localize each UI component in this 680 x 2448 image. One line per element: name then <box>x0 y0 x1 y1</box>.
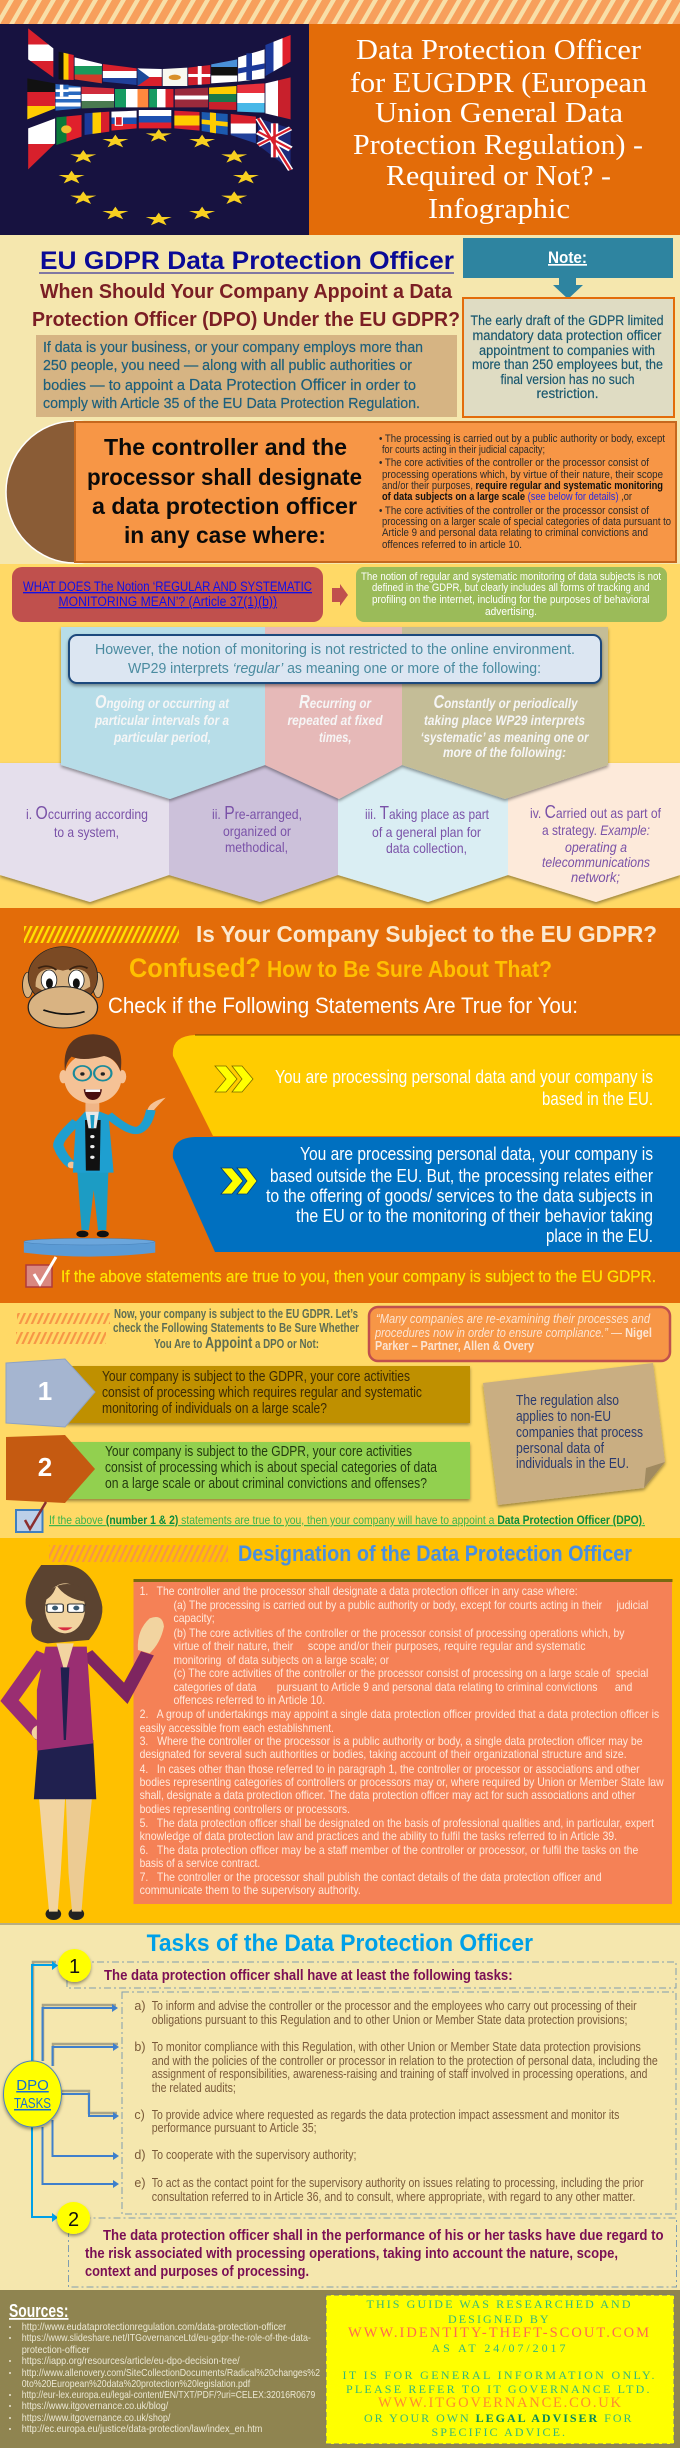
credits box: THIS GUIDE WAS RESEARCHED AND <box>366 2297 631 2311</box>
DPO tasks ellipse <box>4 2061 62 2127</box>
panel: designation articles: offences referred to in Article 10. <box>174 1693 325 1707</box>
tasks list box: a) <box>134 1999 146 2013</box>
systematic meaning items: telecommunications <box>542 854 650 870</box>
credits box: OR YOUR OWN LEGAL ADVISER FOR <box>364 2411 632 2425</box>
heading: Designation of the Data Protection Officer <box>238 1541 632 1566</box>
subheading: confused: Confused? <box>129 953 261 983</box>
intro text <box>113 1307 359 1352</box>
heading: is your company subject: Is Your Company Subject to the EU GDPR? <box>196 921 657 947</box>
panel: designation articles: capacity; <box>174 1611 215 1625</box>
text block: if data is your business: comply with Article 35 of the EU Data Protection Regulation. <box>43 395 420 412</box>
tasks list box: performance pursuant to Article 35; <box>152 2121 317 2135</box>
systematic meaning items: ii. Pre-arranged, <box>212 803 302 823</box>
bullet list: Article 9 and personal data relating to criminal convictions and <box>382 527 648 539</box>
header: title panel: Protection Regulation) - <box>353 130 643 161</box>
task 2 box: the risk associated with processing operations, taking into account the nature, scope, <box>85 2245 618 2262</box>
regular meaning items: taking place WP29 interprets <box>424 712 585 728</box>
hatch decoration <box>49 1545 228 1562</box>
DPO tasks ellipse: DPO <box>16 2077 49 2094</box>
bullet list: of data subjects on a large scale (see below for details) ,or <box>382 491 632 503</box>
tasks list box: To cooperate with the supervisory authority; <box>152 2148 356 2162</box>
tasks list box: the related audits; <box>152 2081 236 2095</box>
check box <box>26 1257 56 1287</box>
regular meaning items: ‘systematic’ as meaning one or <box>420 729 590 745</box>
regular meaning items: Ongoing or occurring at <box>95 692 230 712</box>
section: regular and systematic monitoring <box>0 564 680 908</box>
number circle 1: 1 <box>69 1956 80 1978</box>
statement: based in EU: based in the EU. <box>542 1089 653 1109</box>
big statement: a data protection officer <box>92 493 357 519</box>
heading: Tasks of the Data Protection Officer <box>147 1930 533 1957</box>
intro text: You Are to Appoint a DPO or Not: <box>154 1335 319 1352</box>
sources heading: Sources: <box>9 2301 68 2321</box>
systematic meaning items: a strategy. Example: <box>542 822 650 838</box>
hatch decoration <box>16 1313 110 1344</box>
icon: curved EU member flags and ring of stars <box>27 28 291 225</box>
credits box: DESIGNED BY <box>448 2312 549 2326</box>
note header with arrow: Note: <box>548 248 587 267</box>
subheading: confused <box>129 953 552 983</box>
subheading: when should your company appoint: When Should Your Company Appoint a Data <box>40 280 453 303</box>
section: designation of the DPO <box>0 1538 680 1923</box>
half circle tab <box>6 421 144 563</box>
callout: what does the notion mean <box>12 567 323 622</box>
systematic meaning items: network; <box>571 869 620 885</box>
note paper: non-EU companies: personal data of <box>516 1441 605 1457</box>
regular meaning items: Constantly or periodically <box>434 692 578 712</box>
top stripes banner <box>0 0 680 24</box>
tasks list box: e) <box>134 2176 146 2190</box>
icon: double chevron <box>221 1168 257 1194</box>
definition box: profiling on the internet, including for the purposes of behavioral <box>372 594 650 606</box>
note text box: appointment to companies with <box>479 343 655 358</box>
systematic meaning items <box>26 802 661 885</box>
conclusion text: If the above (number 1 & 2) statements are true to you, then your company will have to appoint a Data Protection Officer (DPO). <box>49 1513 645 1527</box>
however box <box>69 635 601 683</box>
bullet list <box>379 433 671 551</box>
text block: if data is your business: bodies — to appoint a Data Protection Officer in order to <box>43 377 416 394</box>
section: footer <box>0 2290 680 2448</box>
definition box: advertising. <box>485 606 537 618</box>
sources list: https://iapp.org/resources/article/eu-dpo-decision-tree/ <box>22 2355 240 2367</box>
intro text: check the Following Statements to Be Sure Whether <box>113 1321 359 1335</box>
text block: if data is your business: If data is your business, or your company employs more than <box>43 339 423 356</box>
item 2: consist of processing which is about special categories of data <box>105 1460 438 1476</box>
regular meaning items: more of the following: <box>443 744 566 760</box>
systematic meaning items: iv. Carried out as part of <box>530 802 661 822</box>
item 1: consist of processing which requires regular and systematic <box>102 1385 422 1401</box>
sources list: http://www.eudataprotectionregulation.com/data-protection-officer <box>22 2321 287 2333</box>
callout: what does the notion mean: MONITORING MEAN’? (Article 37(1)(b)) <box>58 594 277 609</box>
bullet list: • The core activities of the controller or the processor consist of <box>379 505 650 517</box>
note text box: more than 250 employees but, the <box>472 357 663 372</box>
header: title panel: Infographic <box>428 194 570 225</box>
illustration: woman in magenta suit <box>10 1565 164 1920</box>
upper row of chevrons <box>61 627 608 799</box>
bullet list: • The core activities of the controller or the processor consist of <box>379 457 650 469</box>
however box: However, the notion of monitoring is not restricted to the online environment. <box>95 642 575 658</box>
sources list: http://www.allenovery.com/SiteCollectionDocuments/Radical%20changes%2 <box>22 2367 320 2379</box>
task 2 box <box>68 2218 676 2287</box>
note paper: non-EU companies: individuals in the EU. <box>516 1456 629 1472</box>
sources list: http://ec.europa.eu/justice/data-protection/law/index_en.htm <box>22 2423 263 2435</box>
panel: designation articles: bodies representing controllers or processors. <box>140 1802 350 1816</box>
systematic meaning items: operating a <box>565 839 627 855</box>
systematic meaning items: methodical, <box>225 839 288 855</box>
header: title panel: Data Protection Officer <box>356 35 642 66</box>
systematic meaning items: organized or <box>223 823 291 839</box>
number circle 2 <box>57 2202 90 2234</box>
check box <box>16 1502 46 1532</box>
big statement: The controller and the <box>104 434 347 460</box>
bullet list: for courts acting in their judicial capacity; <box>382 444 545 456</box>
subheading: when should your company appoint <box>32 280 460 331</box>
sources list: 0to%20European%20data%20protection%20legislation.pdf <box>22 2378 250 2390</box>
credits box: SPECIFIC ADVICE. <box>432 2425 565 2439</box>
note header with arrow <box>463 238 673 299</box>
big statement <box>87 434 362 548</box>
systematic meaning items: i. Occurring according <box>26 803 148 823</box>
bullet list: offences referred to in article 10. <box>382 539 522 551</box>
regular meaning items: particular period, <box>113 729 211 745</box>
subheading: when should your company appoint: Protection Officer (DPO) Under the EU GDPR? <box>32 308 460 331</box>
systematic meaning items: data collection, <box>386 840 467 856</box>
lower row of chevrons <box>0 763 680 902</box>
sources list: https://www.itgovernance.co.uk/blog/ <box>22 2400 168 2412</box>
item 2 <box>6 1435 470 1503</box>
item 2: Your company is subject to the GDPR, your core activities <box>105 1444 412 1460</box>
systematic meaning items: of a general plan for <box>372 824 481 840</box>
sources list <box>9 2321 320 2435</box>
regular meaning items: repeated at fixed <box>288 712 383 728</box>
note text box: restriction. <box>536 386 598 401</box>
orange box <box>75 422 676 562</box>
section: when to appoint a DPO <box>0 235 680 564</box>
text block: if data is your business: 250 people, you need — along with all public authorities or <box>43 357 412 374</box>
task 1 heading box: The data protection officer shall have at least the following tasks: <box>104 1967 513 1984</box>
DPO tasks ellipse: TASKS <box>14 2095 51 2112</box>
conclusion text: If the above statements are true to you, then your company is subject to the EU GDPR. <box>61 1268 656 1286</box>
item 2: 2 <box>38 1452 52 1482</box>
note paper: non-EU companies: applies to non-EU <box>516 1409 611 1425</box>
panel: designation articles <box>134 1579 672 1904</box>
item 1: monitoring of individuals on a large scale? <box>102 1401 327 1417</box>
panel: controller and processor shall designate <box>6 421 676 563</box>
header: EU flags panel <box>0 24 309 235</box>
note text box: The early draft of the GDPR limited <box>470 313 664 328</box>
quote box: procedures now in order to ensure compliance.” — Nigel <box>374 1325 652 1340</box>
big statement: in any case where: <box>124 522 326 548</box>
task 1 heading box <box>67 1962 676 1988</box>
section: do you need to appoint a DPO <box>0 1303 680 1538</box>
tasks list box <box>122 1992 676 2214</box>
header: title panel <box>309 24 680 235</box>
icon: double chevron <box>215 1066 253 1092</box>
sources list: protection-officer <box>22 2344 90 2356</box>
item 1: 1 <box>38 1376 52 1406</box>
credits box: WWW.IDENTITY-THEFT-SCOUT.COM <box>348 2325 649 2341</box>
panel: designation articles: (b) The core activities of the controller or the processor consist of processing operations which, by <box>174 1626 624 1640</box>
statement: based in EU <box>173 1035 680 1136</box>
item 2: on a large scale or about criminal convictions and offenses? <box>105 1476 427 1492</box>
big statement: processor shall designate <box>87 464 362 490</box>
hatch decoration <box>24 926 179 943</box>
tasks list box: b) <box>134 2040 146 2054</box>
credits box: AS AT 24/07/2017 <box>432 2341 566 2355</box>
header: title panel: Required or Not? - <box>386 161 611 192</box>
note paper: non-EU companies: companies that process <box>516 1425 643 1441</box>
definition box <box>356 567 667 622</box>
note paper: non-EU companies: The regulation also <box>516 1393 619 1409</box>
header: title panel: for EUGDPR (European <box>350 68 647 99</box>
item 1 <box>6 1359 470 1427</box>
panel: designation articles: virtue of their nature, their scope and/or their purposes, require regular and systematic <box>174 1639 586 1653</box>
panel: designation articles: easily accessible from each establishment. <box>140 1721 334 1735</box>
quote box <box>369 1307 670 1361</box>
tasks list box: c) <box>134 2108 145 2122</box>
illustration: man with glasses on platform <box>24 1034 166 1257</box>
panel: designation articles: basis of a service contract. <box>140 1856 260 1870</box>
heading: EU GDPR Data Protection Officer: EU GDPR Data Protection Officer <box>40 247 454 275</box>
note text box <box>463 298 674 417</box>
sources list: https://www.itgovernance.co.uk/shop/ <box>22 2412 170 2424</box>
however box: WP29 interprets ‘regular’ as meaning one or more of the following: <box>128 661 541 677</box>
subheading: confused: How to Be Sure About That? <box>267 956 552 982</box>
arrow <box>332 584 348 606</box>
systematic meaning items: iii. Taking place as part <box>365 803 489 823</box>
credits box: WWW.ITGOVERNANCE.CO.UK <box>378 2395 622 2411</box>
panel: designation articles: knowledge of data protection law and practices and the ability to fulfil the tasks referred to in Article 39. <box>140 1829 617 1843</box>
intro text: Now, your company is subject to the EU GDPR. Let’s <box>114 1307 358 1321</box>
tasks list box: d) <box>134 2148 146 2162</box>
panel: designation articles: monitoring of data subjects on a large scale; or <box>174 1653 389 1667</box>
panel: designation articles: 1. The controller and the processor shall designate a data protection officer in any case where: <box>140 1584 578 1598</box>
note text box: final version has no such <box>500 372 634 387</box>
task 2 box: context and purposes of processing. <box>85 2263 309 2280</box>
section: is your company subject to the GDPR <box>0 908 680 1303</box>
systematic meaning items: to a system, <box>54 824 119 840</box>
credits box: PLEASE REFER TO IT GOVERNANCE LTD. <box>346 2382 650 2396</box>
credits box: IT IS FOR GENERAL INFORMATION ONLY. <box>342 2368 654 2382</box>
statement: based outside EU: place in the EU. <box>546 1226 653 1246</box>
regular meaning items: times, <box>319 729 352 745</box>
panel: designation articles: communicate them to the supervisory authority. <box>140 1883 361 1897</box>
callout: what does the notion mean: WHAT DOES The Notion ‘REGULAR AND SYSTEMATIC <box>23 579 312 594</box>
sources list: http://eur-lex.europa.eu/legal-content/EN/TXT/PDF/?uri=CELEX:32016R0679 <box>22 2389 315 2401</box>
icon: confused monkey <box>23 947 103 1028</box>
connector arrows <box>32 1961 119 2222</box>
regular meaning items: particular intervals for a <box>94 712 229 728</box>
sources list: https://www.slideshare.net/ITGovernanceLtd/eu-gdpr-the-role-of-the-data- <box>22 2332 311 2344</box>
section: tasks of the DPO <box>0 1923 680 2290</box>
header: title panel: Union General Data <box>375 98 624 129</box>
credits box <box>326 2295 674 2444</box>
number circle 2: 2 <box>68 2209 79 2231</box>
quote box: Parker – Partner, Allen & Overy <box>375 1338 535 1353</box>
statement: based outside EU <box>173 1137 680 1252</box>
text block: if data is your business <box>36 335 457 417</box>
note paper: non-EU companies <box>483 1363 665 1505</box>
note text box: mandatory data protection officer <box>472 328 662 343</box>
item 1: Your company is subject to the GDPR, your core activities <box>102 1369 410 1385</box>
regular meaning items: Recurring or <box>299 692 372 712</box>
panel: designation articles: 7. The controller or the processor shall publish the contact details of the data protection officer and <box>140 1870 602 1884</box>
number circle 1 <box>58 1949 91 1982</box>
regular meaning items <box>94 692 590 760</box>
subheading: check statements: Check if the Following Statements Are True for You: <box>108 993 578 1018</box>
